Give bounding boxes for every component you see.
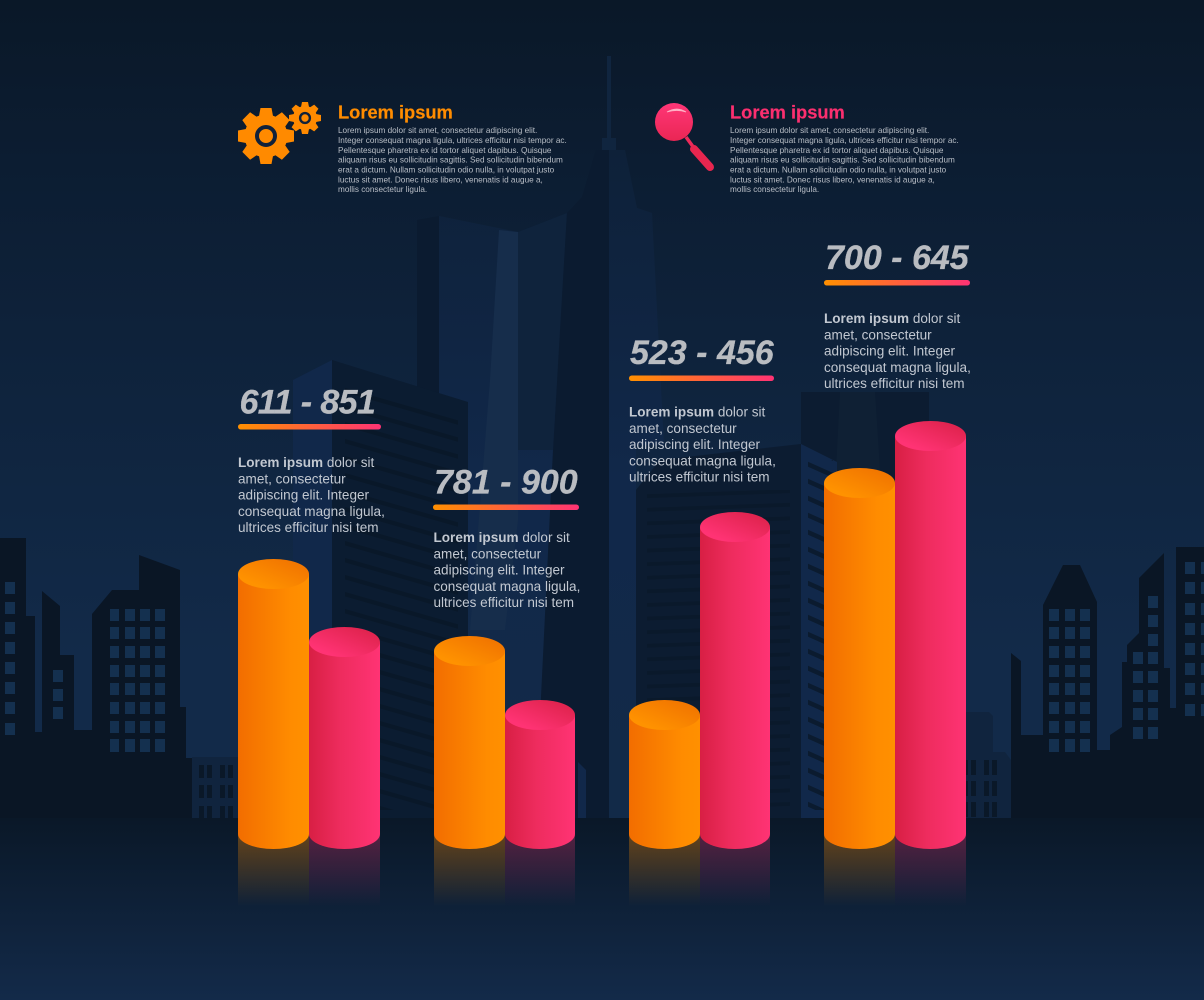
text: gears paragraph: luctus sit amet. Donec risus libero, venenatis id augue a, [338,175,543,184]
text: magnifier paragraph: erat a dictum. Nullam sollicitudin odio nulla, in volutpat justo [730,166,947,174]
bar reflections [238,834,966,906]
cylinder: orange [629,700,700,849]
heading: gears: Lorem ipsum [338,102,453,122]
text block: adipiscing elit. Integer [238,488,370,503]
text block: consequat magna ligula, [238,504,385,519]
underline [238,424,381,430]
city: central towers [293,56,929,818]
text: magnifier paragraph: Lorem ipsum dolor sit amet, consectetur adipiscing elit. [730,126,929,135]
text block: amet, consectetur [238,471,346,486]
panel: group 611 - 851 [238,384,389,849]
text: magnifier paragraph: Pellentesque pharetra ex id tortor aliquet dapibus. Quisque [730,146,944,155]
text: magnifier paragraph: aliquam risus eu sollicitudin sagittis. Sed sollicitudin bibendum [730,156,955,165]
panel: group 523 - 456 [629,334,780,849]
text: magnifier paragraph: mollis consectetur ligula. [730,185,819,194]
ground [0,818,1204,1000]
text block: Lorem ipsum dolor sit [238,455,374,470]
skyline left [0,538,192,818]
cylinder: pink [700,512,770,849]
icon: magnifying glass [655,103,710,167]
text block: consequat magna ligula, [824,360,971,375]
text block: amet, consectetur [629,421,737,436]
text block: Lorem ipsum dolor sit [629,404,765,420]
text block: ultrices efficitur nisi tem [824,376,965,391]
value: 781 - 900: 781 - 900 [434,464,578,502]
value: 700 - 645: 700 - 645 [825,239,970,277]
cylinder: orange [238,559,309,849]
text: gears paragraph: erat a dictum. Nullam sollicitudin odio nulla, in volutpat justo [338,166,555,174]
text: gears paragraph: mollis consectetur ligula. [338,185,427,194]
tower: right front block [636,444,837,818]
text: magnifier paragraph: Integer consequat magna ligula, ultrices efficitur nisi tempor ac. [730,136,959,145]
underline [824,280,970,286]
text block: amet, consectetur [824,327,932,342]
small building right [966,712,1011,818]
skyline right [1011,547,1204,818]
tower: right rear block [801,392,929,818]
panel: group 781 - 900 [433,464,584,849]
text block: adipiscing elit. Integer [629,437,761,452]
text: gears paragraph: Pellentesque pharetra ex id tortor aliquet dapibus. Quisque [338,146,552,155]
tower: left glass building [417,213,567,818]
cylinder: pink [895,421,966,849]
text block: amet, consectetur [434,546,542,561]
cylinder: orange [824,468,895,849]
text: magnifier paragraph: luctus sit amet. Donec risus libero, venenatis id augue a, [730,175,935,184]
panel: group 700 - 645 [824,239,975,849]
heading: magnifier: Lorem ipsum [730,102,845,122]
text block: ultrices efficitur nisi tem [629,470,770,485]
value: 611 - 851: 611 - 851 [240,384,375,422]
block: magnifier description [730,102,961,194]
text block: ultrices efficitur nisi tem [434,595,574,610]
tower: central spire [535,56,664,818]
text block: Lorem ipsum dolor sit [434,530,570,545]
text: gears paragraph: aliquam risus eu sollicitudin sagittis. Sed sollicitudin bibendum [338,156,563,165]
text block: adipiscing elit. Integer [824,344,956,359]
cylinder: pink [505,700,575,849]
block: gears description [338,102,569,194]
text: gears paragraph: Integer consequat magna ligula, ultrices efficitur nisi tempor ac. [338,136,567,145]
text block: consequat magna ligula, [434,579,580,594]
text block: consequat magna ligula, [629,453,776,468]
text block: Lorem ipsum dolor sit [824,311,960,326]
icon: gears [238,102,321,164]
text block: ultrices efficitur nisi tem [238,520,379,535]
underline [433,504,579,510]
value: 523 - 456: 523 - 456 [630,334,775,372]
small building left [192,757,238,818]
cylinder: pink [309,627,380,849]
cylinder: orange [434,636,505,849]
text: gears paragraph: Lorem ipsum dolor sit amet, consectetur adipiscing elit. [338,126,537,135]
text block: adipiscing elit. Integer [434,563,565,578]
tower: left front block [293,360,468,818]
underline [629,376,774,381]
